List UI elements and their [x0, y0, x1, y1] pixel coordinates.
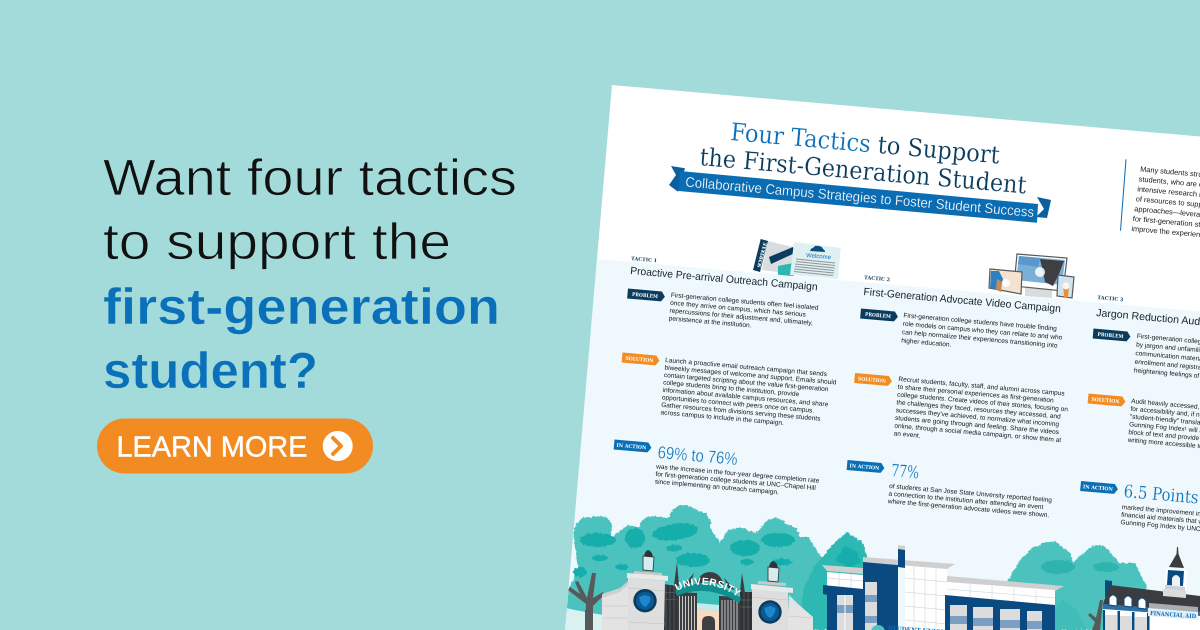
solution text: opportunities to connect with peers once on campus. [662, 394, 815, 415]
snow ground [565, 608, 603, 630]
in action tag [847, 460, 885, 473]
solution text: online, through a social media campaign, or show them at [894, 423, 1062, 444]
icon: email schedule materials [753, 239, 841, 279]
solution text: an event. [893, 430, 921, 440]
subtitle ribbon: Collaborative Campus Strategies to Foster Student Success [685, 174, 1035, 220]
problem tag: PROBLEM [865, 312, 892, 320]
gate: spikes and crest [674, 562, 745, 593]
headline: student? [103, 342, 318, 399]
solution text: students are going through and feeling. Share the videos [895, 415, 1060, 436]
panel: tactics background [565, 259, 1200, 630]
intro text block [1120, 159, 1200, 237]
solution tag [854, 373, 892, 386]
solution text: Launch a proactive email outreach campaign that sends [665, 357, 828, 378]
tactic 1 heading: Proactive Pre-arrival Outreach Campaign [630, 265, 818, 293]
title line two: the First-Generation Student [698, 142, 1028, 200]
solution text: the challenges they faced, resources they accessed, and [896, 399, 1061, 421]
solution text: successes they've achieved, to normalize what incoming [895, 407, 1060, 428]
problem text: can help normalize their experiences transitioning into [902, 329, 1058, 350]
problem text: First-generation college students have trouble finding [903, 312, 1057, 333]
tactic 1 column [614, 256, 839, 500]
problem tag: PROBLEM [1097, 332, 1124, 340]
solution tag [622, 352, 660, 366]
tactic 2 label: TACTIC 2 [864, 275, 890, 283]
solution text: biweekly messages of welcome and support. Emails should [664, 364, 837, 387]
headline: Want four tactics [103, 149, 517, 206]
university gate [602, 550, 813, 630]
solution tag [1088, 394, 1126, 407]
left lamp [643, 550, 654, 571]
icon: email schedule materials: SCHEDULE [757, 242, 769, 269]
tactic 2 heading: First-Generation Advocate Video Campaign [863, 286, 1061, 315]
problem tag [860, 308, 898, 322]
trees: left group [565, 505, 868, 630]
right pillar [751, 581, 813, 630]
in action text: where the first-generation advocate videos were shown. [887, 498, 1050, 519]
stat: 77%: 77% [890, 461, 920, 483]
problem text: repercussions for their adjustment and, ultimately, [669, 308, 813, 327]
headline [103, 149, 517, 399]
solution text: Gather resources from divisions serving these students [661, 402, 821, 423]
solution text: information about available campus resources, and share [662, 387, 829, 408]
financial aid building [1088, 547, 1200, 630]
button: learn more [97, 418, 373, 474]
in action tag: IN ACTION [616, 443, 647, 451]
tactic 2 column [847, 275, 1071, 520]
icon: chevron circle [323, 431, 353, 461]
in action tag [1080, 481, 1118, 494]
tactic 1 label: TACTIC 1 [631, 256, 657, 264]
infographic page preview [565, 85, 1200, 630]
problem tag: PROBLEM [632, 292, 659, 300]
tactic 3 column [1080, 295, 1200, 534]
solution text: across campus to include in the campaign. [660, 409, 784, 427]
headline: to support the [103, 213, 451, 270]
solution text: Recruit students, faculty, staff, and alumni across campus [898, 376, 1066, 398]
problem tag [1093, 328, 1131, 342]
solution text: college students bring to the institution, provide [663, 379, 800, 398]
headline: first-generation [103, 278, 500, 335]
sign: financial aid: FINANCIAL AID [1150, 611, 1196, 620]
solution tag: SOLUTION [858, 376, 887, 385]
button: learn more: LEARN MORE [116, 432, 308, 464]
tree trunk [568, 573, 604, 630]
solution text: contain targeted scripting about the value first-generation [664, 372, 829, 393]
title: Four Tactics to Support [729, 117, 1001, 170]
in action text: was the increase in the four-year degree completion rate [655, 463, 820, 485]
problem text: higher education. [901, 337, 952, 349]
gate: sky and path [696, 590, 720, 612]
solution text: to share their personal experiences as first-generation [897, 384, 1054, 404]
tactic 3 label: TACTIC 3 [1097, 295, 1124, 303]
problem text: once they arrive on campus, which has serious [670, 300, 807, 319]
right lamp [768, 561, 779, 582]
icon: video devices [989, 254, 1074, 298]
campus illustration [565, 505, 1200, 630]
in action text: for first-generation college students at UNC–Chapel Hill [655, 471, 817, 492]
in action text: since implementing an outreach campaign. [655, 478, 779, 496]
problem tag [627, 288, 665, 302]
tree trunk base [585, 610, 593, 630]
solution tag: SOLUTION [1091, 397, 1120, 405]
problem text: First-generation college students often feel isolated [671, 292, 819, 312]
bush [871, 625, 885, 630]
problem text: persistence at the institution. [668, 315, 752, 330]
gate: ironwork [663, 584, 753, 630]
trees: right group [1008, 541, 1147, 630]
clock tower [1163, 547, 1187, 598]
in action tag: IN ACTION [849, 463, 880, 472]
problem text: role models on campus who they can relate to and who [902, 321, 1063, 342]
in action tag [614, 440, 652, 453]
icon: email schedule materials: Welcome [806, 253, 832, 261]
in action text: of students at San Jose State University reported feeling [889, 483, 1053, 504]
in action text: marked the improvement in [1122, 504, 1200, 518]
solution text: college students. Create videos of their stories, focusing on [897, 392, 1068, 414]
gate: arch banner [675, 584, 741, 603]
university gate: UNIVERSITY [674, 578, 741, 596]
stat: 69% to 76%: 69% to 76% [657, 442, 738, 469]
left pillar [602, 571, 668, 630]
in action tag: IN ACTION [1083, 484, 1114, 493]
solution tag: SOLUTION [625, 356, 654, 364]
in action text: Gunning Fog Index by UNC [1120, 519, 1200, 533]
in action text: a connection to the institution after attending an event [888, 491, 1044, 511]
student union building [822, 545, 1064, 630]
